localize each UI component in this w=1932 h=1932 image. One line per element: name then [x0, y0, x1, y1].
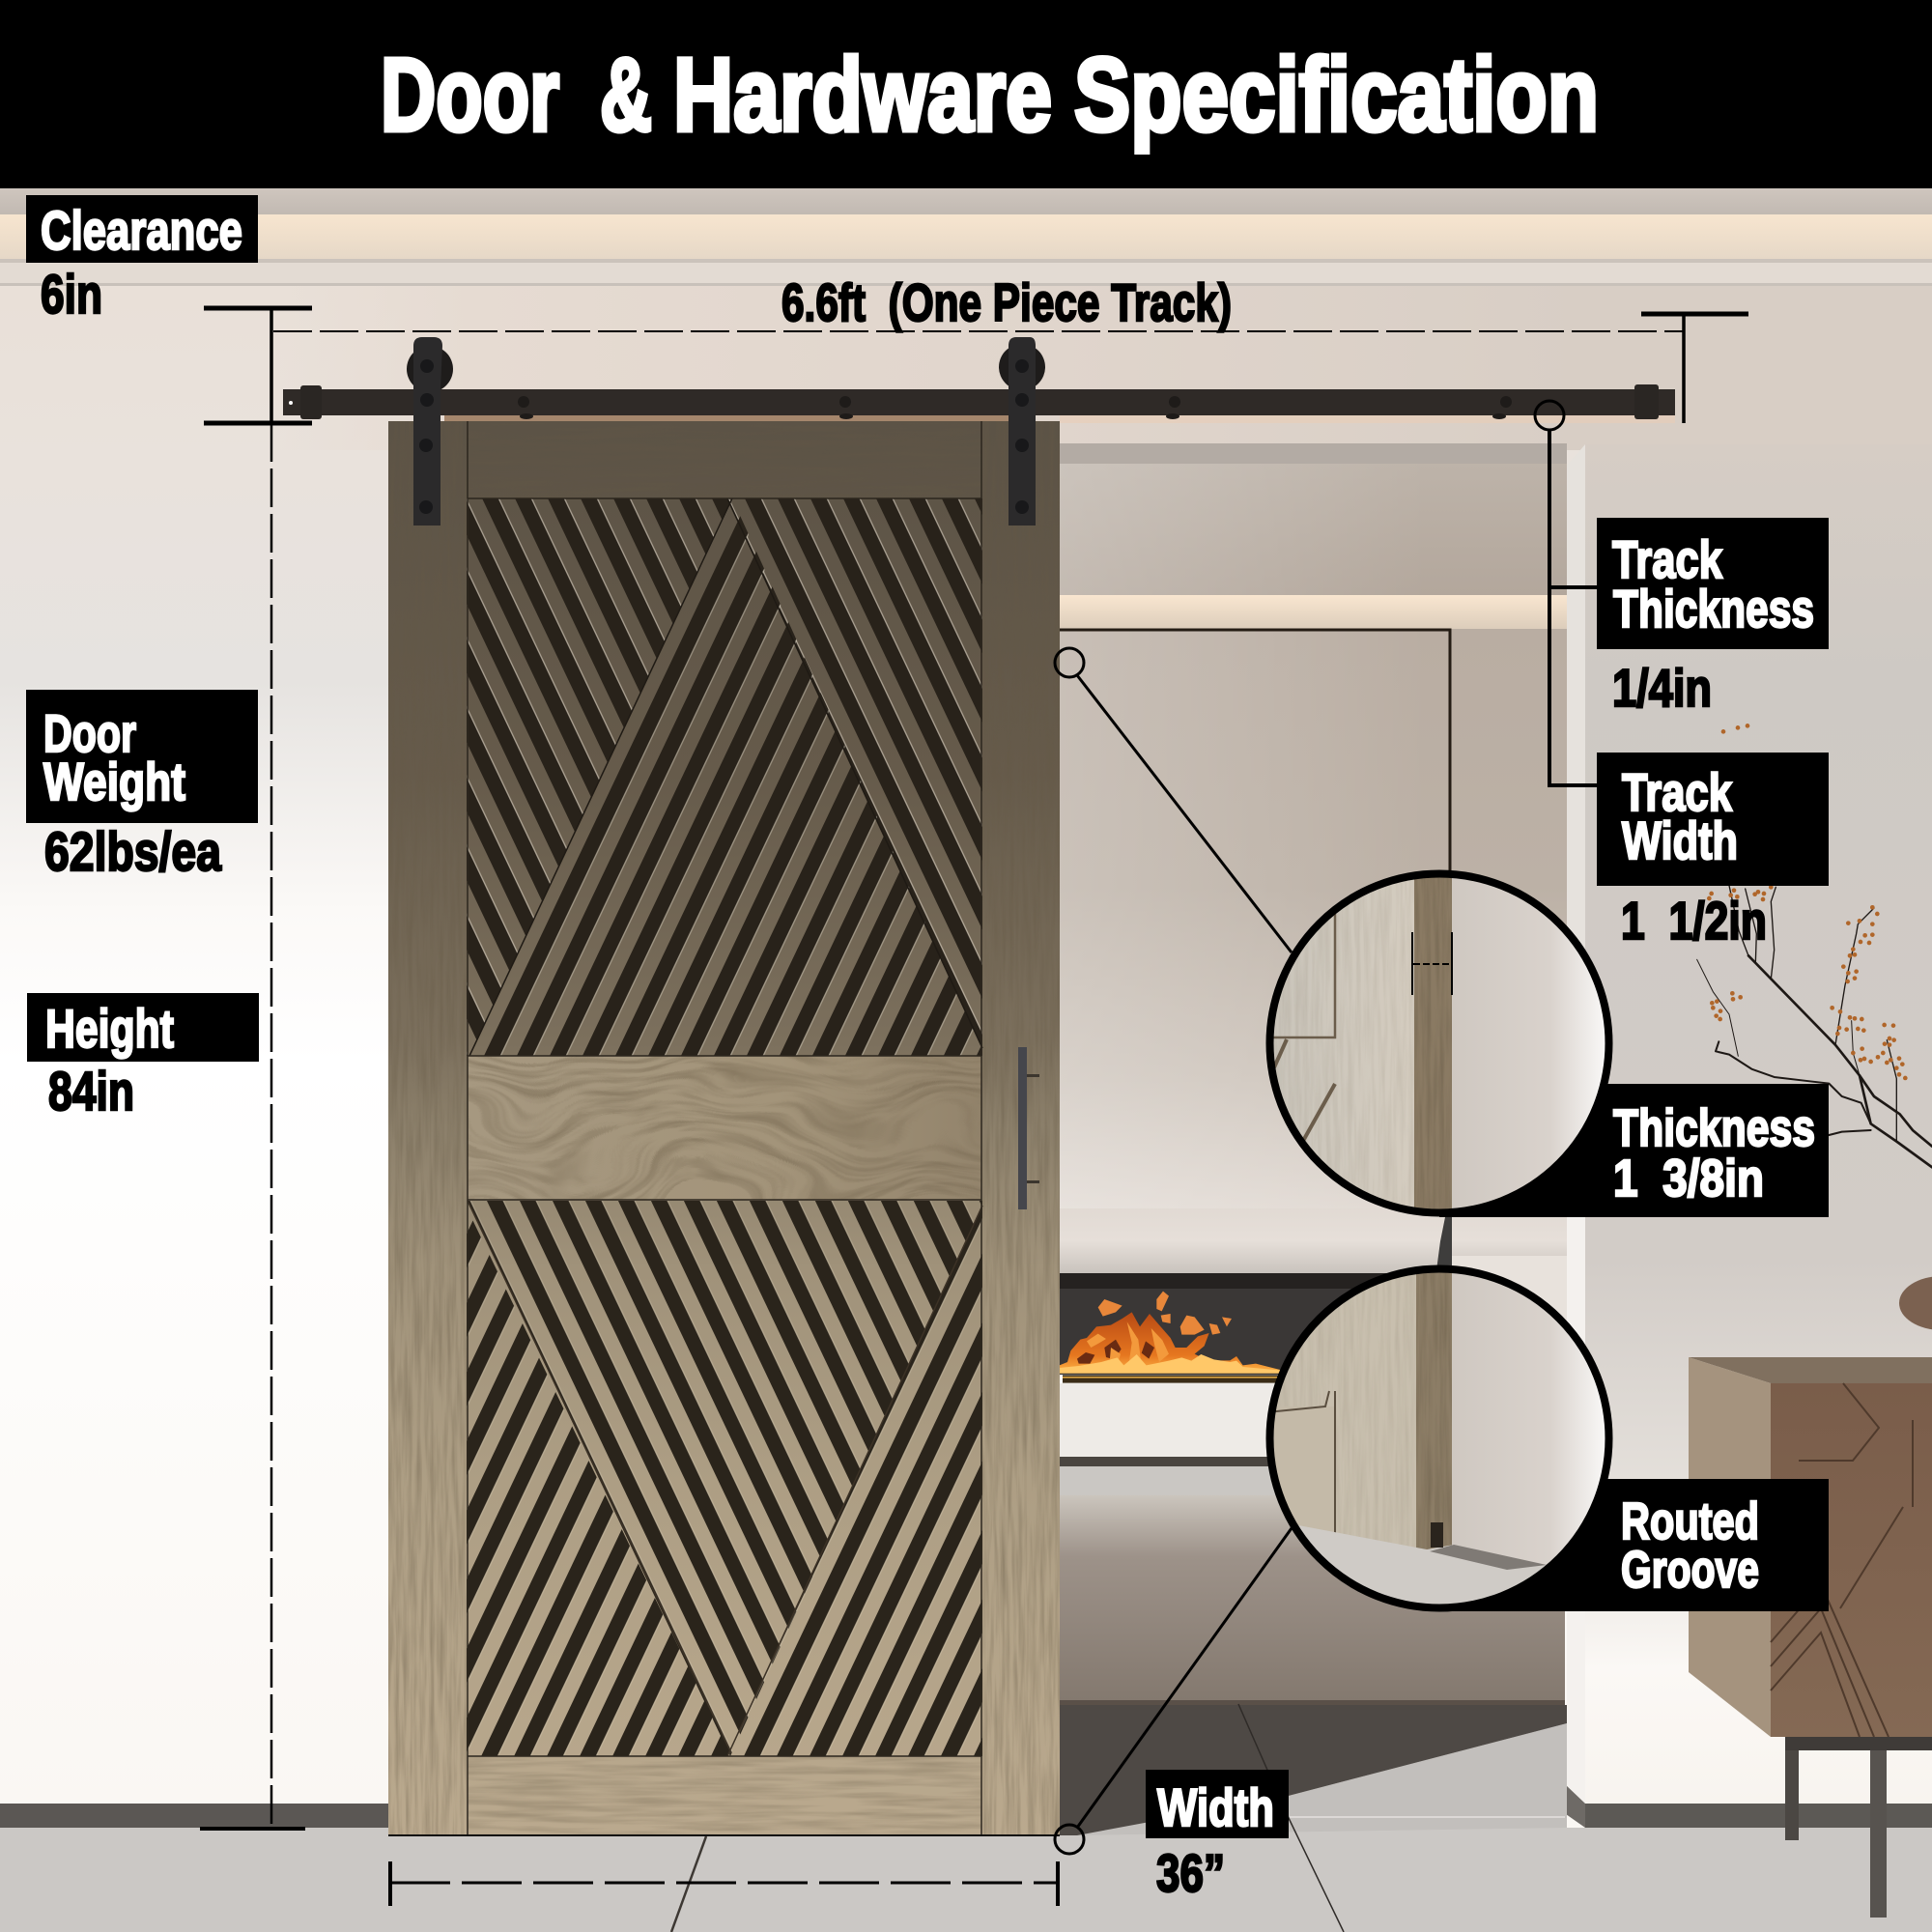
callout: routed groove — [1439, 1479, 1829, 1611]
callout: thickness: Thickness — [1613, 1099, 1815, 1157]
right hanger — [999, 337, 1045, 526]
console cabinet — [1689, 1357, 1932, 1918]
leader lines — [1055, 401, 1597, 1854]
callout: door weight: Weight — [43, 752, 185, 811]
title: Hardware — [673, 36, 1052, 153]
callout: width: 36” — [1156, 1843, 1225, 1903]
callout: thickness: 1 3/8in — [1613, 1150, 1764, 1208]
connector between lenses — [1436, 1212, 1452, 1270]
callout: track width: Track — [1622, 762, 1732, 822]
heading band — [0, 0, 1932, 188]
callout: clearance: Clearance — [41, 200, 242, 262]
callout: track thickness: 1/4in — [1612, 658, 1712, 718]
callout: routed groove: Routed — [1621, 1492, 1759, 1550]
sliding track — [283, 384, 1675, 423]
rail grain — [468, 423, 981, 1835]
height dimension — [200, 423, 305, 1829]
routed groove notch — [1431, 1522, 1443, 1548]
doorway and room beyond — [1060, 443, 1585, 1932]
callout: track thickness — [1597, 518, 1829, 718]
thickness dimension mark — [1412, 932, 1452, 995]
track length dimension — [273, 314, 1748, 423]
callout: track width: Width — [1622, 810, 1738, 870]
callout: height — [27, 993, 259, 1122]
title: Door — [381, 36, 559, 153]
floor shadow — [1072, 1723, 1567, 1835]
sofa — [1060, 1495, 1565, 1700]
track screws — [518, 396, 1512, 419]
fireplace — [1060, 1273, 1456, 1466]
callout: track width — [1597, 753, 1829, 951]
callout: track thickness: Thickness — [1613, 579, 1814, 639]
upper slat panel — [467, 498, 982, 1056]
lens: door thickness detail — [1265, 869, 1616, 1217]
callout: height: 84in — [48, 1061, 134, 1122]
callout: routed groove: Groove — [1621, 1541, 1759, 1599]
lens: routed groove detail — [1265, 1265, 1616, 1613]
title: Specification — [1074, 36, 1599, 153]
lower slat panel — [467, 1201, 982, 1756]
track length label: 6.6ft (One Piece Track) — [781, 272, 1232, 332]
branch with berries — [1697, 724, 1932, 1167]
callout: track thickness: Track — [1612, 529, 1722, 589]
left baseboard — [0, 1804, 388, 1828]
door frame seams — [468, 421, 981, 1835]
flames — [1060, 1292, 1282, 1383]
callout: height: Height — [45, 998, 174, 1059]
left hanger — [407, 337, 453, 526]
stile grain — [388, 421, 1060, 1835]
width dimension — [390, 1861, 1058, 1906]
callout: width: Width — [1157, 1777, 1274, 1837]
callout: clearance: 6in — [41, 264, 102, 326]
barn door — [388, 421, 1060, 1836]
callout: track width: 1 1/2in — [1621, 891, 1767, 951]
callout: door weight: Door — [43, 703, 136, 763]
title — [381, 36, 1599, 153]
track end stops — [300, 384, 1659, 419]
callout: thickness — [1439, 1084, 1829, 1217]
callout: clearance — [26, 195, 258, 326]
callout: door weight: 62lbs/ea — [44, 821, 222, 883]
callout: door weight — [26, 690, 258, 883]
title: & — [600, 36, 652, 153]
door handle — [1018, 1047, 1039, 1209]
vase — [1899, 1276, 1932, 1330]
floor tile joints — [1238, 1704, 1565, 1932]
clearance dimension — [204, 308, 312, 423]
callout: width — [1146, 1770, 1289, 1903]
